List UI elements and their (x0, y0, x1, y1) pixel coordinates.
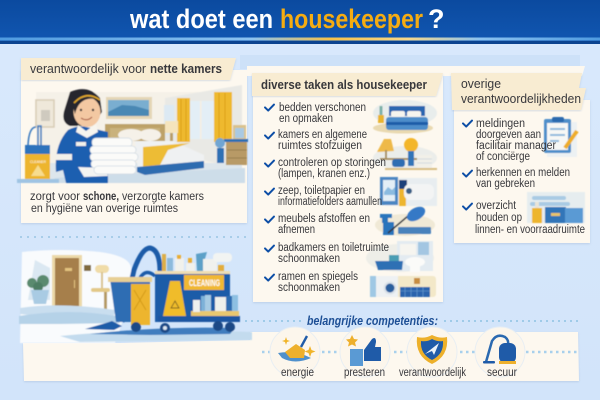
cleaning sign (184, 275, 224, 290)
competencies heading: belangrijke competenties: (307, 313, 438, 328)
painting (106, 97, 152, 119)
woman (63, 89, 102, 126)
task list: controleren op storingen (278, 157, 386, 169)
task list: badkamers en toiletruimte (278, 242, 389, 254)
bed (105, 124, 165, 141)
illustration: cleaning cart in hotel corridor (19, 248, 252, 343)
task list: afnemen (278, 224, 315, 236)
panel heading: verantwoordelijkheden (461, 92, 581, 106)
yellow bag (131, 284, 150, 325)
panel text: verzorgte kamers (122, 191, 204, 203)
task list: kamers en algemene (278, 129, 367, 141)
task list: bedden verschonen (279, 102, 366, 114)
cart body (155, 272, 230, 322)
icon: clipboard (544, 117, 577, 157)
towels (90, 138, 138, 174)
top shelf bottles (162, 254, 166, 271)
task list: schoonmaken (278, 253, 340, 265)
decorative dots (20, 236, 246, 238)
responsibilities list: doorgeven aan (476, 129, 541, 141)
dresser and vase (226, 141, 247, 165)
responsibilities list: overzicht (476, 200, 517, 212)
panel heading: diverse taken als housekeeper (261, 78, 427, 92)
icon: linen and storage (527, 192, 585, 223)
responsibilities list: van gebreken (476, 178, 535, 190)
title: housekeeper (280, 4, 423, 34)
floor (20, 305, 115, 318)
icon: lamp and bulb (373, 138, 437, 170)
panel heading: verantwoordelijk voor (30, 62, 146, 76)
responsibilities list: houden op (476, 212, 522, 224)
responsibilities list (463, 118, 585, 236)
wheels (131, 322, 141, 332)
icon: feather duster and spray (375, 204, 435, 236)
task list: en opmaken (279, 113, 333, 125)
task list: schoonmaken (278, 282, 340, 294)
illustration: hotel room with housekeeper: CLEANER (30, 159, 46, 164)
responsibilities list: herkennen en melden (476, 167, 570, 179)
illustration: hotel room with housekeeper (17, 85, 248, 183)
responsibilities list: of conciërge (476, 151, 530, 163)
corridor door (52, 255, 82, 307)
panel text (30, 191, 204, 215)
cleaning caddy (28, 126, 41, 145)
panel: overige verantwoordelijkheden (451, 73, 590, 243)
header banner (0, 0, 600, 44)
mop (85, 321, 122, 330)
lamp (165, 121, 178, 133)
plant (27, 278, 37, 288)
panel heading (461, 77, 581, 106)
competency: secuur (475, 327, 525, 379)
panel text: schone, (83, 191, 119, 203)
competency label: presteren (344, 367, 385, 379)
panel heading: nette kamers (150, 62, 222, 76)
illustration: cleaning cart in hotel corridor: CLEANING (189, 278, 220, 288)
panel text: zorgt voor (30, 191, 80, 203)
task list: ruimtes stofzuigen (278, 140, 362, 152)
responsibilities list: meldingen (476, 118, 525, 130)
icon: bathroom (366, 241, 434, 272)
panel tag (21, 58, 236, 80)
window (188, 101, 214, 139)
task list: ramen en spiegels (278, 271, 358, 283)
panel text: en hygiëne van overige ruimtes (31, 203, 178, 215)
panel tag (252, 73, 443, 96)
task list: informatiefolders aamullen (278, 196, 382, 208)
decorative dots (245, 320, 580, 322)
task list: meubels afstoffen en (278, 213, 370, 225)
task list (265, 102, 389, 294)
hose (122, 248, 160, 322)
icon: bed (373, 100, 437, 134)
competency label: secuur (487, 367, 517, 379)
panel heading: overige (461, 77, 501, 91)
competency label: verantwoordelijk (399, 367, 466, 379)
competency label: energie (281, 367, 314, 379)
task list: (lampen, kranen enz.) (278, 168, 370, 180)
title: wat doet een (129, 4, 273, 34)
panel: verantwoordelijk voor nette kamers (17, 58, 248, 223)
bucket (110, 279, 150, 322)
icon: folders and soap (380, 177, 437, 206)
wet floor sign (163, 281, 186, 316)
panel tag (451, 73, 586, 110)
responsibilities list: facilitair manager (476, 140, 556, 152)
side table and lamp (95, 265, 109, 273)
competency: energie (270, 327, 320, 379)
competency: verantwoordelijk (399, 327, 466, 379)
panel: belangrijke competenties (23, 313, 580, 381)
title: ? (428, 4, 444, 34)
competency: presteren (340, 327, 390, 379)
shelf items (193, 300, 200, 312)
curtains (177, 98, 190, 142)
panel: diverse taken als housekeeper (247, 66, 585, 302)
icon: washing machine and basket (370, 276, 436, 297)
task list: zeep, toiletpapier en (278, 185, 365, 197)
